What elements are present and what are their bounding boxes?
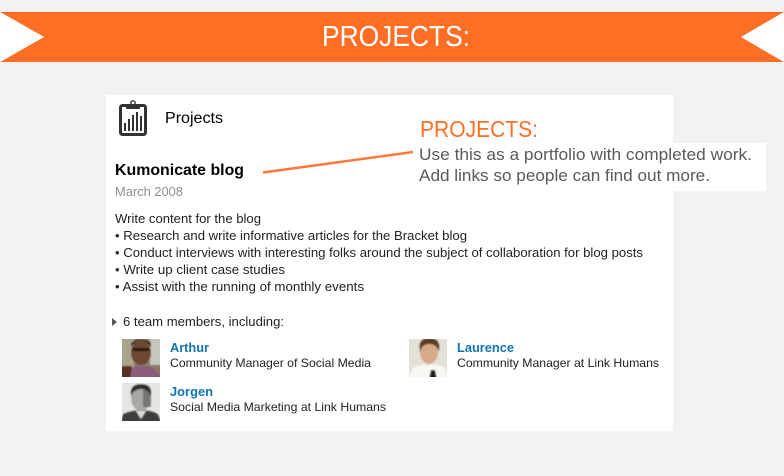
project description: • Research and write informative articles for the Bracket blog (115, 228, 467, 243)
panel: projects card (106, 95, 673, 431)
project description: • Write up client case studies (115, 262, 286, 277)
banner (0, 12, 784, 62)
team member: Arthur (122, 339, 371, 377)
callout arrow line (263, 152, 413, 172)
project description: Write content for the blog (115, 211, 261, 226)
callout text (419, 146, 752, 185)
callout text: Use this as a portfolio with completed work. (419, 146, 752, 164)
callout text: Add links so people can find out more. (419, 167, 710, 185)
project title: Kumonicate blog (115, 162, 244, 179)
team members heading: 6 team members, including: (123, 314, 284, 329)
team member: Jorgen: Jorgen (170, 384, 213, 399)
project description (115, 211, 643, 294)
project description: • Assist with the running of monthly events (115, 279, 365, 294)
project date: March 2008 (115, 184, 183, 199)
team member: Jorgen (122, 383, 386, 421)
team member: Arthur: Community Manager of Social Media (170, 356, 371, 370)
callout (263, 116, 766, 191)
team member: Laurence: Community Manager at Link Humans (457, 356, 659, 370)
team member: Laurence (409, 339, 658, 377)
section heading: Projects (165, 110, 223, 127)
team member: Arthur: Arthur (170, 340, 209, 355)
callout heading: PROJECTS: (420, 116, 538, 142)
team member: Laurence: Laurence (457, 340, 514, 355)
team member: Jorgen: Social Media Marketing at Link Humans (170, 400, 386, 414)
icon: clipboard chart (120, 101, 146, 134)
project description: • Conduct interviews with interesting folks around the subject of collaboration for blog posts (115, 245, 643, 260)
banner title: PROJECTS: (322, 21, 470, 53)
